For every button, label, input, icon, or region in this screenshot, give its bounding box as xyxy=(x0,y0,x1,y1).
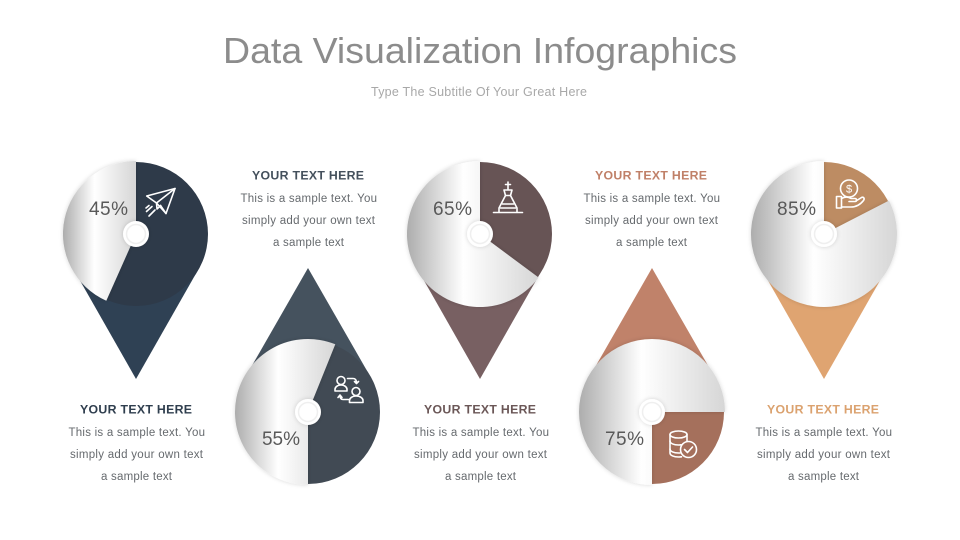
text block: column 2 xyxy=(240,168,377,249)
pin dial xyxy=(752,162,896,306)
body text: a sample text xyxy=(273,237,345,249)
percentage: 75% xyxy=(605,429,644,450)
icon: people exchange xyxy=(335,376,363,402)
pin dial xyxy=(64,162,208,306)
heading: YOUR TEXT HERE xyxy=(767,402,879,416)
centre hub xyxy=(467,221,493,247)
metallic wedge xyxy=(235,339,335,485)
icon: dollar sign: $ xyxy=(846,184,852,196)
body text xyxy=(584,193,720,249)
drop dial xyxy=(580,340,724,484)
text block: column 4 xyxy=(584,168,720,249)
body text xyxy=(240,193,377,249)
icon: hand with coin xyxy=(836,180,864,208)
body text: simply add your own text xyxy=(757,449,891,461)
body text: This is a sample text. You xyxy=(412,427,549,439)
body text: a sample text xyxy=(445,471,517,483)
centre hub xyxy=(123,221,149,247)
pin dial xyxy=(408,162,552,306)
heading: YOUR TEXT HERE xyxy=(252,168,364,182)
title: Data Visualization Infographics xyxy=(223,30,737,71)
drop point xyxy=(590,268,714,376)
panel: drop 75% xyxy=(579,268,725,485)
heading: YOUR TEXT HERE xyxy=(424,402,536,416)
text block: column 3 xyxy=(412,402,549,483)
drop dial xyxy=(236,340,380,484)
percentage: 65% xyxy=(433,199,472,220)
body text: a sample text xyxy=(788,471,860,483)
body text: simply add your own text xyxy=(414,449,548,461)
body text xyxy=(756,427,892,483)
percentage: 45% xyxy=(89,199,128,220)
centre hub xyxy=(639,399,665,425)
metallic wedge xyxy=(579,339,725,485)
pin point xyxy=(762,270,886,379)
drop point xyxy=(246,268,370,376)
pin point xyxy=(418,270,542,379)
body text: simply add your own text xyxy=(242,215,376,227)
text block: column 1 xyxy=(68,402,205,483)
text block: column 5 xyxy=(756,402,892,483)
body text: This is a sample text. You xyxy=(68,427,205,439)
percentage: 85% xyxy=(777,199,816,220)
heading: YOUR TEXT HERE xyxy=(80,402,192,416)
body text xyxy=(412,427,549,483)
body text: simply add your own text xyxy=(70,449,204,461)
body text: a sample text xyxy=(101,471,173,483)
panel: pin 65% xyxy=(407,161,552,379)
metallic wedge xyxy=(407,161,539,307)
centre hub xyxy=(295,399,321,425)
body text: This is a sample text. You xyxy=(240,193,377,205)
panel: pin 85% xyxy=(751,161,897,379)
body text: This is a sample text. You xyxy=(756,427,892,439)
icon: chess king xyxy=(494,182,522,212)
body text: simply add your own text xyxy=(585,215,719,227)
body text xyxy=(68,427,205,483)
icon: paper plane xyxy=(146,188,175,216)
metallic wedge xyxy=(63,161,136,301)
panel: pin 45% xyxy=(63,161,208,379)
metallic wedge xyxy=(751,161,897,307)
icon: database check xyxy=(670,431,696,458)
heading: YOUR TEXT HERE xyxy=(595,168,707,182)
subtitle: Type The Subtitle Of Your Great Here xyxy=(371,85,587,99)
pin point xyxy=(74,270,198,379)
centre hub xyxy=(811,221,837,247)
panel: drop 55% xyxy=(235,268,380,485)
body text: a sample text xyxy=(616,237,688,249)
percentage: 55% xyxy=(262,429,300,450)
body text: This is a sample text. You xyxy=(584,193,720,205)
